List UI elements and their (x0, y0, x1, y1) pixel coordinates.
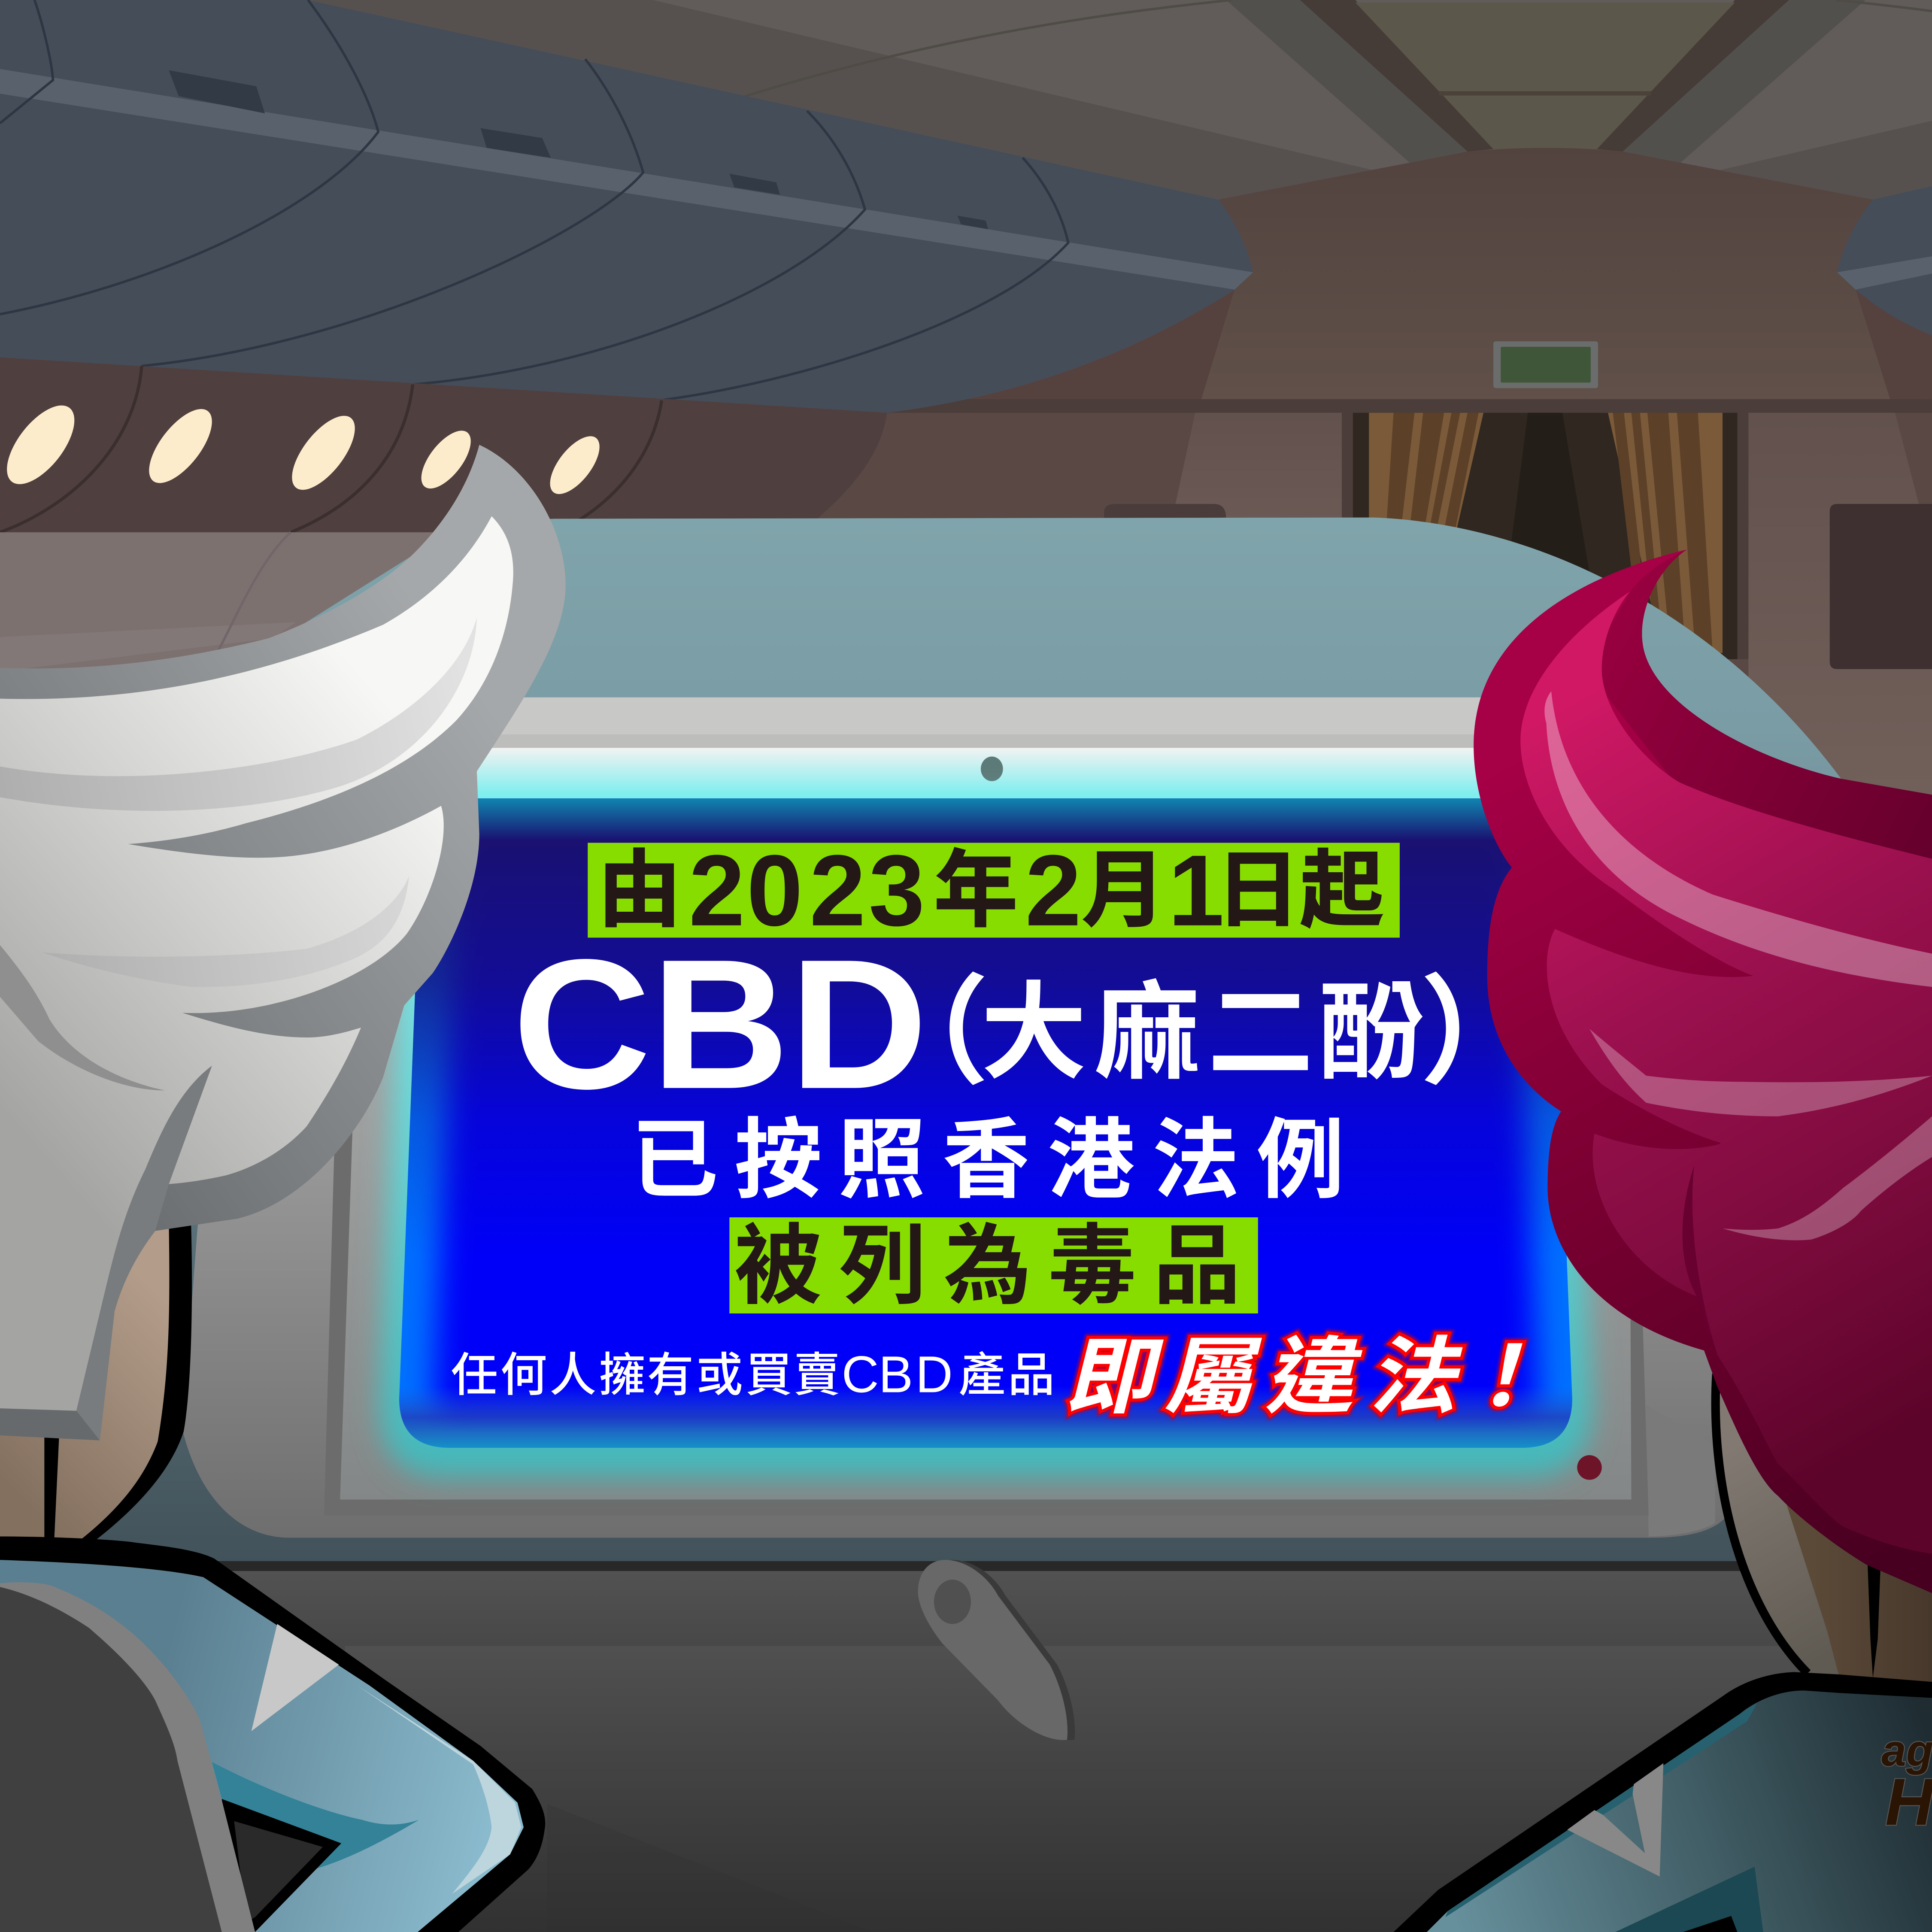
heading date: 2 (1025, 834, 1081, 947)
listed as poison: 被列為毒品 (734, 1218, 1241, 1315)
cabin ceiling (0, 0, 1932, 419)
teal stripe (212, 1762, 419, 1869)
right passenger neck (1716, 1374, 1932, 1688)
pink locks (1520, 591, 1932, 1306)
small warning text: 任何人擁有或買賣 (451, 1349, 840, 1401)
highlight lower (1723, 1116, 1932, 1240)
left passenger jacket (0, 1537, 545, 1932)
heading date: 2023 (689, 834, 925, 947)
heading date: 月 (1082, 843, 1166, 937)
screen housing (182, 698, 1725, 1538)
heading date: 日 (1216, 843, 1300, 937)
grey collar (1567, 1763, 1663, 1877)
headrest left (0, 1582, 255, 1932)
curtain right (1608, 413, 1723, 653)
blue screen (394, 789, 1577, 1448)
left passenger neck (0, 1220, 192, 1543)
tray latch (918, 1560, 1075, 1740)
jacket logo (1881, 1725, 1932, 1839)
curtain left (1369, 413, 1483, 536)
chemical name: ） (1419, 967, 1538, 1098)
chemical name (871, 967, 1538, 1098)
upper dark band (1602, 549, 1932, 862)
teal panel (1615, 1867, 1763, 1932)
heading date: 由 (597, 843, 681, 937)
small warning text: 產品 (958, 1349, 1055, 1401)
jacket logo: ag (1881, 1725, 1932, 1775)
highlight top (1544, 691, 1932, 987)
screen glow (379, 801, 1592, 1477)
chemical name: （ (871, 967, 989, 1098)
lower seat back (0, 1561, 1932, 1932)
shoulder shade (1445, 1703, 1757, 1917)
law line: 已按照香港法例 (631, 1112, 1344, 1209)
heading date: 年 (934, 843, 1018, 937)
doorway opening (1502, 413, 1597, 616)
chemical name: 大麻二酚 (981, 974, 1424, 1092)
green highlight box two (729, 1217, 1258, 1313)
white collar (252, 1624, 339, 1731)
central bulkhead (887, 148, 1932, 413)
small warning text: CBD (842, 1346, 953, 1404)
CBD title: CBD (513, 921, 928, 1128)
illegal warning: 即屬違法！ (1060, 1330, 1563, 1424)
seat back (0, 518, 1932, 1565)
small headrest lump (1104, 504, 1226, 520)
green highlight box one (588, 843, 1400, 937)
overhead bins left (0, 0, 1253, 413)
exit sign (1493, 341, 1598, 388)
dark crescent (1683, 1166, 1725, 1356)
left passenger white hair (0, 445, 566, 1441)
heading date: 起 (1300, 843, 1384, 937)
black lapel gap (222, 1799, 341, 1932)
dark lapel (1683, 1916, 1737, 1932)
sleeve highlight (357, 1686, 521, 1894)
fog band (0, 532, 435, 690)
wall panel (1830, 504, 1932, 669)
right passenger magenta hair (1474, 549, 1932, 1593)
highlight middle (1589, 1029, 1932, 1116)
rear wall and doorway (690, 413, 1932, 862)
jacket logo: H (1885, 1765, 1932, 1839)
heading date: 1 (1168, 834, 1224, 947)
indicator dot (1577, 1455, 1602, 1480)
right passenger jacket (1394, 1672, 1932, 1932)
illegal warning: 即屬違法！ (1060, 1330, 1563, 1424)
screen frame (324, 986, 1649, 1516)
reading light panel (0, 357, 887, 532)
big lock (1692, 1060, 1932, 1554)
overhead bin right (1837, 186, 1932, 335)
